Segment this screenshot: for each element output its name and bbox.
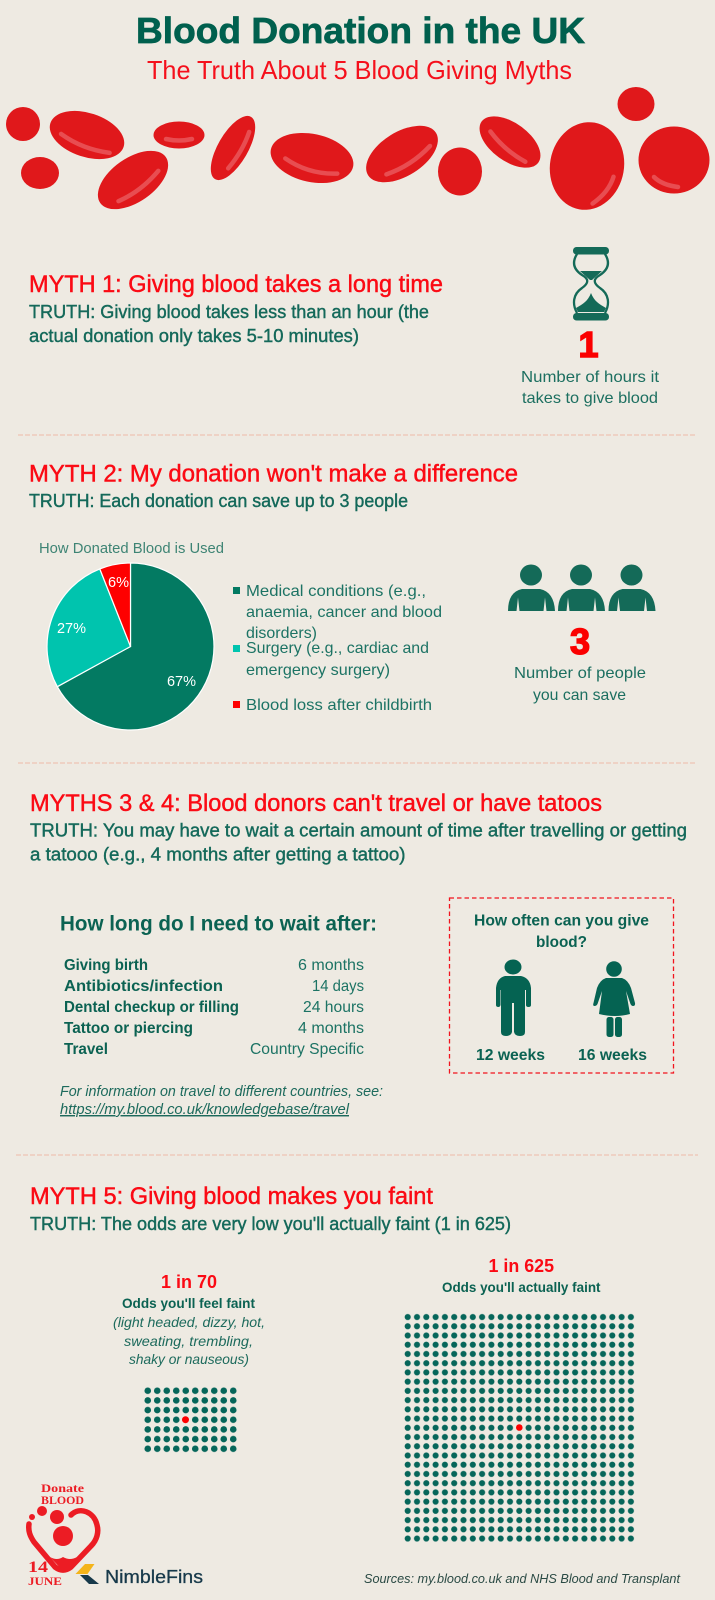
table: waiting times: Antibiotics/infection xyxy=(64,978,223,995)
heading: myth 5: MYTH 5: Giving blood makes you faint xyxy=(30,1183,433,1210)
logo: donate blood 14 june: BLOOD xyxy=(41,1493,84,1507)
text: truth 5: TRUTH: The odds are very low you'll actually faint (1 in 625) xyxy=(30,1214,511,1234)
table: waiting times: Giving birth xyxy=(64,957,148,974)
stat: 1 in 70: sweating, trembling, xyxy=(124,1333,253,1349)
table: waiting times: 14 days xyxy=(312,978,364,995)
legend: Surgery (e.g., cardiac and xyxy=(246,640,429,657)
dot grid: 1 in 70 xyxy=(143,1386,238,1454)
text: hours caption: takes to give blood xyxy=(522,390,658,407)
table: waiting times xyxy=(64,957,364,1058)
label: 12 weeks: 12 weeks xyxy=(476,1047,545,1064)
text: truth 1: actual donation only takes 5-10 minutes) xyxy=(29,326,359,346)
logo: donate blood 14 june xyxy=(28,1481,98,1588)
text: travel note xyxy=(60,1084,383,1118)
stat: 1 in 70: shaky or nauseous) xyxy=(129,1351,249,1367)
stat: 1 in 70: (light headed, dizzy, hot, xyxy=(113,1314,265,1330)
stat: 1 in 70: Odds you'll feel faint xyxy=(122,1295,255,1311)
stat: 1 in 70: 1 in 70 xyxy=(161,1272,217,1292)
text: truth 1: TRUTH: Giving blood takes less than an hour (the xyxy=(29,302,429,322)
text: truth 3 and 4 xyxy=(30,820,687,864)
heading: myth 1: MYTH 1: Giving blood takes a long time xyxy=(29,271,443,298)
legend xyxy=(233,583,442,714)
panel: how often can you give blood xyxy=(450,898,674,1073)
text: truth 1 xyxy=(29,302,429,346)
text: hours caption: Number of hours it xyxy=(521,369,660,386)
text: truth 3 and 4: TRUTH: You may have to wait a certain amount of time after travelling or getting xyxy=(30,820,687,840)
text: people caption: you can save xyxy=(533,687,626,704)
table: waiting times: Dental checkup or filling xyxy=(64,999,239,1016)
table: waiting times: Country Specific xyxy=(250,1041,364,1058)
legend: emergency surgery) xyxy=(246,662,390,679)
table: waiting times: Tattoo or piercing xyxy=(64,1020,193,1037)
legend: Medical conditions (e.g., xyxy=(246,583,426,600)
icon: woman xyxy=(593,961,635,1037)
stat: 1 hour: 1 xyxy=(578,324,599,365)
logo: donate blood 14 june: 14 xyxy=(28,1559,48,1576)
icon: man xyxy=(496,960,531,1036)
icon: three people xyxy=(508,564,656,611)
stat: 1 in 625: Odds you'll actually faint xyxy=(442,1279,601,1295)
legend: Blood loss after childbirth xyxy=(246,697,432,714)
text: hours caption xyxy=(521,369,660,407)
text: sources: Sources: my.blood.co.uk and NHS Blood and Transplant xyxy=(364,1572,681,1586)
table: waiting times: 6 months xyxy=(298,957,364,974)
heading: myth 2: MYTH 2: My donation won't make a difference xyxy=(29,460,518,488)
legend: anaemia, cancer and blood xyxy=(246,604,442,621)
chart title: How Donated Blood is Used xyxy=(39,540,224,557)
panel heading xyxy=(474,912,649,951)
icon: hourglass xyxy=(573,247,609,320)
table: waiting times: Travel xyxy=(64,1041,108,1058)
text: truth 3 and 4: a tatooo (e.g., 4 months after getting a tattoo) xyxy=(30,844,406,864)
panel heading: How often can you give xyxy=(474,912,649,930)
text: people caption xyxy=(514,665,646,704)
text: travel note: For information on travel to different countries, see: xyxy=(60,1084,383,1100)
text: truth 2: TRUTH: Each donation can save up to 3 people xyxy=(29,491,408,511)
title: Blood Donation in the UK xyxy=(136,10,585,51)
pie chart: 6% xyxy=(108,574,129,591)
legend: disorders) xyxy=(246,625,317,642)
text: travel note: https://my.blood.co.uk/knowledgebase/travel xyxy=(60,1102,350,1118)
table: waiting times: 24 hours xyxy=(303,999,364,1016)
logo: nimblefins: NimbleFins xyxy=(105,1566,203,1587)
text: people caption: Number of people xyxy=(514,665,646,682)
table: waiting times: 4 months xyxy=(298,1020,364,1037)
pie chart: 27% xyxy=(57,620,86,637)
subtitle: The Truth About 5 Blood Giving Myths xyxy=(147,55,572,85)
dot grid: 1 in 625 xyxy=(403,1312,636,1543)
pie chart xyxy=(47,563,214,730)
heading: waiting table: How long do I need to wait after: xyxy=(60,912,377,936)
label: 16 weeks: 16 weeks xyxy=(578,1047,647,1064)
illustration: red blood cells xyxy=(6,87,710,221)
panel heading: blood? xyxy=(536,934,587,951)
logo: donate blood 14 june: Donate xyxy=(41,1481,85,1495)
stat: 3 people: 3 xyxy=(570,621,590,662)
logo: nimblefins xyxy=(76,1564,203,1587)
stat: 1 in 70 xyxy=(113,1272,265,1367)
logo: donate blood 14 june: JUNE xyxy=(28,1574,62,1588)
heading: myths 3 and 4: MYTHS 3 & 4: Blood donors can't travel or have tatoos xyxy=(30,790,602,817)
pie chart: 67% xyxy=(167,673,196,690)
stat: 1 in 625 xyxy=(442,1256,601,1295)
stat: 1 in 625: 1 in 625 xyxy=(488,1256,554,1276)
